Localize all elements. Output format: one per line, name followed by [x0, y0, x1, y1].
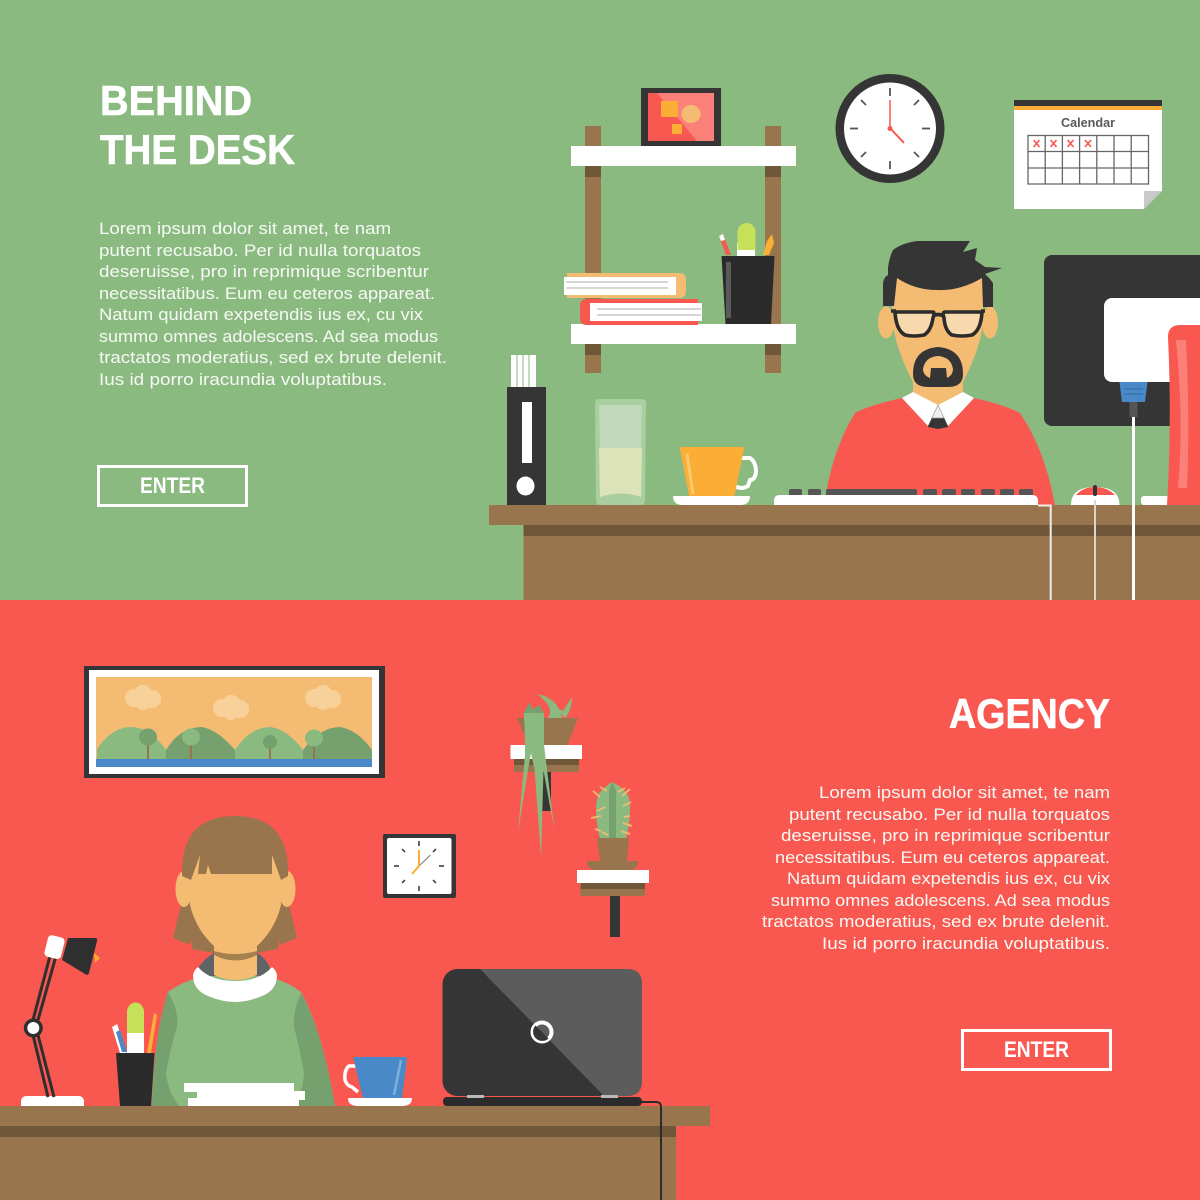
wall shelves [571, 126, 796, 373]
icon: framed picture on shelf [641, 88, 721, 146]
button: enter top: ENTER [140, 473, 205, 498]
neck [214, 945, 257, 980]
icon: orange cup [673, 447, 756, 505]
mouse [1071, 485, 1120, 600]
icon: binder with papers [507, 355, 546, 505]
text block: lorem ipsum top: putent recusabo. Per id nulla torquatos [99, 241, 421, 260]
button: enter bottom: ENTER [1004, 1037, 1069, 1062]
keyboard [774, 489, 1038, 505]
text block: lorem ipsum bottom [762, 783, 1111, 953]
text block: lorem ipsum bottom: necessitatibus. Eum eu ceteros appareat. [775, 848, 1110, 867]
text block: lorem ipsum bottom: Natum quidam expetendis ius ex, cu vix [787, 869, 1111, 888]
text block: lorem ipsum top: Lorem ipsum dolor sit amet, te nam [99, 219, 391, 238]
button: enter top [98, 466, 246, 506]
text block: lorem ipsum bottom: putent recusabo. Per id nulla torquatos [789, 805, 1110, 824]
icon: stack of papers [184, 1083, 305, 1106]
icon: pen cup on shelf [719, 223, 774, 324]
button: enter bottom [962, 1030, 1110, 1070]
text block: lorem ipsum top: Natum quidam expetendis ius ex, cu vix [99, 305, 424, 324]
icon: hanging plant on shelf [510, 694, 582, 857]
desk top panel [489, 505, 1200, 600]
panel: behind the desk [0, 0, 1200, 600]
icon: calendar: Calendar [1061, 115, 1115, 130]
icon: blue cup [345, 1057, 412, 1106]
ears [878, 306, 998, 338]
text block: lorem ipsum top: summo omnes adolescens. Ad sea modus [99, 327, 438, 346]
sweater sleeves [152, 992, 335, 1106]
desktop stand [1141, 325, 1200, 505]
icon: stacked books [564, 273, 702, 325]
turtleneck back [198, 953, 270, 985]
text block: lorem ipsum top: Ius id porro iracundia voluptatibus. [99, 370, 387, 389]
title: behind the desk [100, 77, 295, 173]
glasses [891, 311, 985, 336]
face and neck [892, 278, 983, 406]
man at desk [824, 241, 1055, 505]
collar [193, 967, 277, 1002]
text block: lorem ipsum top: deseruisse, pro in reprimique scribentur [99, 262, 429, 281]
title: behind the desk: BEHIND [100, 77, 252, 124]
lower back hair [173, 900, 297, 953]
hair [883, 241, 1002, 307]
monitor [1044, 255, 1200, 600]
text block: lorem ipsum bottom: Ius id porro iracundia voluptatibus. [822, 934, 1110, 953]
ears [176, 871, 296, 907]
sweater [152, 976, 335, 1106]
woman at desk [152, 816, 335, 1106]
framed landscape picture [84, 666, 385, 778]
desk bottom panel [0, 1102, 710, 1200]
text block: lorem ipsum top: tractatos moderatius, sed ex brute delenit. [99, 348, 447, 367]
title: behind the desk: THE DESK [100, 126, 295, 173]
panel: agency [0, 600, 1200, 1200]
title: agency: AGENCY [949, 690, 1110, 737]
beard [913, 347, 963, 387]
text block: lorem ipsum top: necessitatibus. Eum eu ceteros appareat. [99, 284, 435, 303]
icon: wall clock [836, 74, 944, 183]
text block: lorem ipsum bottom: summo omnes adolescens. Ad sea modus [771, 891, 1110, 910]
icon: desk lamp [21, 934, 100, 1106]
icon: glass of water [595, 399, 646, 505]
text block: lorem ipsum bottom: tractatos moderatius, sed ex brute delenit. [762, 912, 1110, 931]
text block: lorem ipsum top [99, 219, 447, 389]
face [190, 855, 281, 953]
collar and tie [902, 392, 974, 429]
icon: square wall clock [383, 834, 456, 898]
icon: calendar [1014, 100, 1162, 209]
icon: laptop [442, 969, 642, 1106]
icon: pen cup on desk [112, 1002, 157, 1106]
text block: lorem ipsum bottom: Lorem ipsum dolor sit amet, te nam [819, 783, 1110, 802]
sweater [824, 398, 1055, 505]
icon: cactus on shelf [577, 782, 649, 937]
text block: lorem ipsum bottom: deseruisse, pro in reprimique scribentur [781, 826, 1110, 845]
fringe and hair cap [182, 816, 288, 880]
